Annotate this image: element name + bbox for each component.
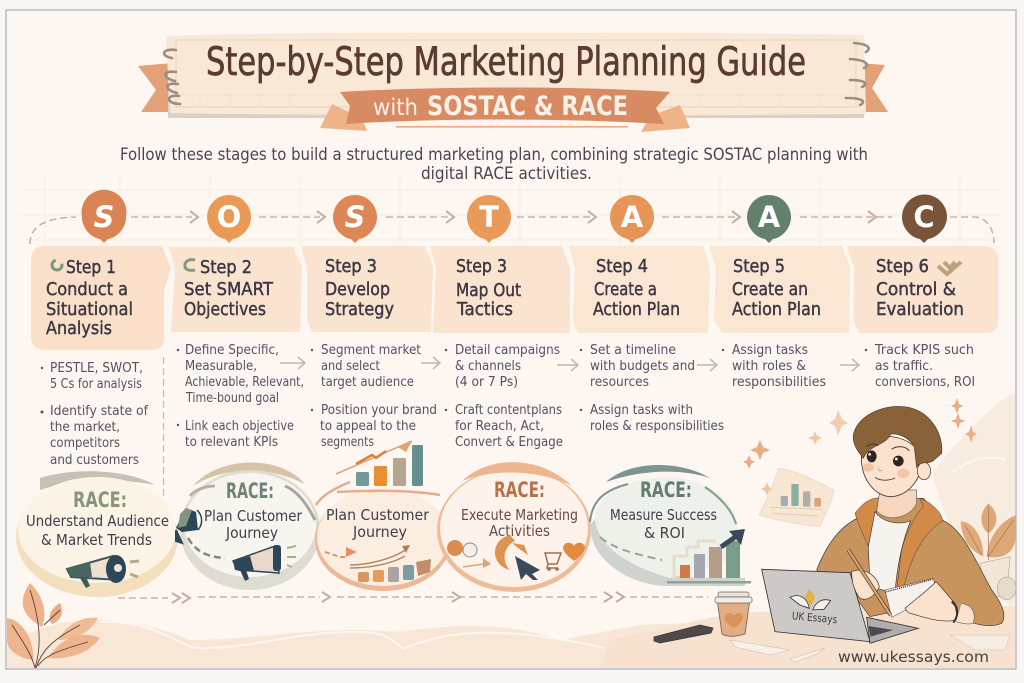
RACE 4: [437, 462, 591, 592]
laptop: [762, 569, 918, 643]
bullet text: step 6: conversions, ROI: [875, 375, 975, 390]
RACE 5: Measure Success: [610, 506, 717, 524]
bullet text: step 3: segments: [321, 435, 374, 450]
step 4 panel: Create a: [594, 279, 657, 300]
RACE 1: RACE:: [73, 488, 127, 512]
sparkles: [743, 398, 977, 496]
bullet text: step 4: [580, 343, 724, 434]
bullet text: step 5: Assign tasks: [732, 343, 808, 358]
icon: coffee cup: [715, 592, 752, 636]
icon: megaphone left: [176, 508, 202, 543]
bullet text: step 6: [865, 343, 975, 390]
step panels: [31, 246, 998, 350]
step 6 panel: Control &: [876, 279, 956, 300]
bullet text: step 2: to relevant KPIs: [185, 435, 278, 450]
RACE 5: [590, 465, 751, 586]
step 4 panel: Step 4: [596, 256, 648, 277]
bullet text: step 2: Achievable, Relevant,: [185, 375, 304, 390]
bullet text: step 1: the market,: [50, 420, 120, 435]
bullet text: step 6: as traffic.: [875, 359, 933, 374]
t-shirt: [868, 512, 911, 593]
illustration: person at laptop: [762, 407, 1016, 643]
marker A green: [747, 195, 791, 243]
bullet text: step 4: Assign tasks with: [590, 403, 693, 418]
intro text: [120, 145, 868, 183]
marker A green: A: [758, 200, 781, 234]
bullet text: step 3: [311, 343, 437, 450]
hand with pen: [852, 570, 879, 599]
step 5 panel: Create an: [732, 279, 808, 300]
spiral rings: [164, 43, 869, 105]
bullet text: step 2: Define Specific,: [185, 343, 279, 358]
hoodie: [817, 498, 1004, 626]
bottom flow dashed arrows: [118, 592, 708, 603]
title text: Step-by-Step Marketing Planning Guide: [206, 40, 806, 85]
step 2 panel: [169, 247, 302, 332]
bullet text: step 1: competitors: [50, 436, 120, 451]
marker T: [467, 195, 511, 243]
marker C: C: [913, 200, 935, 234]
desk items: [600, 592, 1015, 668]
bullet text: step 1: Identify state of: [50, 404, 148, 419]
step 3 panel: [301, 246, 433, 332]
step 2 panel: Set SMART: [184, 279, 274, 300]
intro text: Follow these stages to build a structured marketing plan, combining strategic SOSTAC planning with: [120, 145, 868, 164]
step 1 panel: Conduct a: [46, 279, 128, 300]
icon: rising chart: [667, 529, 751, 584]
bullet text: step 2: Link each objective: [185, 419, 294, 434]
bullet text: step 1: PESTLE, SWOT,: [50, 361, 143, 376]
hand right: [905, 582, 957, 621]
top flow dashed arrows: [30, 211, 994, 244]
column arrows: [280, 357, 859, 371]
ear: [917, 462, 931, 480]
marker S: S: [94, 200, 114, 234]
marker A: A: [621, 200, 644, 234]
RACE 2: Journey: [225, 524, 278, 542]
RACE 3: [315, 441, 451, 591]
bullet text: tactics: & channels: [455, 359, 521, 374]
bullet text: step 2: Time-bound goal: [185, 391, 279, 406]
step 4 panel: Action Plan: [593, 299, 680, 320]
notepad: [885, 578, 937, 617]
RACE 2: RACE:: [226, 479, 274, 503]
RACE 4: Execute Marketing: [461, 506, 578, 524]
icons: marketing activities: [447, 535, 585, 580]
title banner: [138, 32, 888, 132]
bullet text: step 1: 5 Cs for analysis: [50, 377, 142, 392]
eyes and smile: [863, 444, 909, 480]
floating chart card: [759, 468, 834, 527]
bullet text: step 4: Set a timeline: [590, 343, 676, 358]
step 3 panel: Step 3: [325, 256, 377, 277]
bullet text: tactics: Craft contentplans: [455, 403, 562, 418]
RACE 2: [176, 462, 320, 590]
RACE 1: & Market Trends: [41, 531, 152, 549]
ribbon tails: [138, 63, 888, 112]
marker S: [82, 190, 126, 243]
RACE 3: Journey: [352, 523, 407, 541]
bullet text: step 4: resources: [590, 375, 649, 390]
step 4 panel: [569, 246, 710, 333]
subtitle ribbon: [320, 88, 690, 132]
step 2 panel: Objectives: [184, 299, 266, 320]
step 2 panel: Step 2: [200, 257, 252, 278]
head: [861, 436, 924, 497]
step 5 panel: [709, 246, 850, 333]
icon: plant leaves: [7, 583, 100, 668]
potted plant: [961, 503, 1016, 600]
bullet text: step 5: with roles &: [732, 359, 806, 374]
step 5 panel: Action Plan: [732, 299, 821, 320]
marker T: T: [479, 200, 499, 234]
step 3 panel: Strategy: [325, 299, 394, 320]
marker S second: S: [345, 200, 365, 234]
step 5 panel: Step 5: [733, 256, 785, 277]
bullet text: tactics: (4 or 7 Ps): [455, 375, 518, 390]
step 1 panel: [31, 246, 171, 350]
bullet text: step 3: and select: [321, 359, 380, 374]
RACE 4: RACE:: [494, 478, 545, 502]
bullet text: step 3: Position your brand: [321, 403, 437, 418]
marker O: O: [217, 200, 241, 234]
step 6 panel: Step 6: [876, 256, 929, 277]
icon: megaphone: [67, 555, 139, 588]
bullet text: step 4: roles & responsibilities: [590, 419, 724, 434]
icon: megaphone right: [233, 545, 296, 581]
bullet text: step 1: [40, 361, 148, 468]
bullet text: step 3: to appeal to the: [320, 419, 416, 434]
divider between step 1 and 2: [162, 357, 164, 496]
bullet text: step 3: target audience: [321, 375, 414, 390]
icon: phone: [654, 625, 713, 643]
hair: [853, 407, 942, 467]
bullet text: step 1: and customers: [50, 453, 139, 468]
marker C: [902, 194, 947, 243]
RACE 4: Activities: [489, 522, 550, 540]
bullet text: step 5: responsibilities: [732, 375, 826, 390]
bullet text: step 4: with budgets and: [590, 359, 695, 374]
bullet text: tactics: Detail campaigns: [455, 343, 560, 358]
step 3 panel: Develop: [325, 279, 390, 300]
marker A: [610, 195, 654, 243]
bullet text: step 2: [177, 343, 304, 450]
bullet text: tactics: for Reach, Act,: [455, 419, 544, 434]
bullet text: step 6: Track KPIS such: [874, 343, 974, 358]
step 1 panel: Situational: [46, 299, 133, 320]
website url: www.ukessays.com: [838, 648, 989, 666]
RACE 1: Understand Audience: [26, 512, 169, 530]
step 6 panel: Evaluation: [876, 299, 964, 320]
marker S second: [333, 195, 377, 243]
step 3 tactics panel: Step 3: [456, 256, 507, 277]
step 3 tactics panel: Map Out: [456, 280, 521, 301]
SOSTAC letter markers: [82, 190, 947, 243]
bullet text: tactics: [445, 343, 563, 450]
subtitle ribbon: with: [373, 95, 418, 121]
intro text: digital RACE activities.: [421, 164, 592, 183]
step 1 panel: Step 1: [66, 257, 116, 278]
step 3 tactics panel: [430, 246, 570, 333]
bullet text: step 5: [722, 343, 826, 390]
bullet text: tactics: Convert & Engage: [455, 435, 563, 450]
RACE 2: Plan Customer: [204, 507, 303, 525]
RACE 1: [16, 471, 178, 597]
bullet text: step 2: Measurable,: [185, 359, 257, 374]
neck: [877, 490, 917, 518]
RACE 5: & ROI: [644, 524, 685, 542]
step 3 tactics panel: Tactics: [456, 299, 513, 320]
subtitle ribbon: SOSTAC & RACE: [427, 91, 628, 122]
icon: small bar chart: [350, 545, 431, 582]
marker O: [207, 195, 251, 243]
laptop: UK Essays: [791, 609, 838, 626]
step 6 panel: [847, 246, 998, 333]
RACE 5: RACE:: [640, 478, 692, 502]
icon: growth chart: [336, 441, 423, 486]
step 1 panel: Analysis: [46, 318, 112, 339]
bullet text: step 3: Segment market: [321, 343, 421, 358]
RACE 3: Plan Customer: [326, 506, 430, 524]
